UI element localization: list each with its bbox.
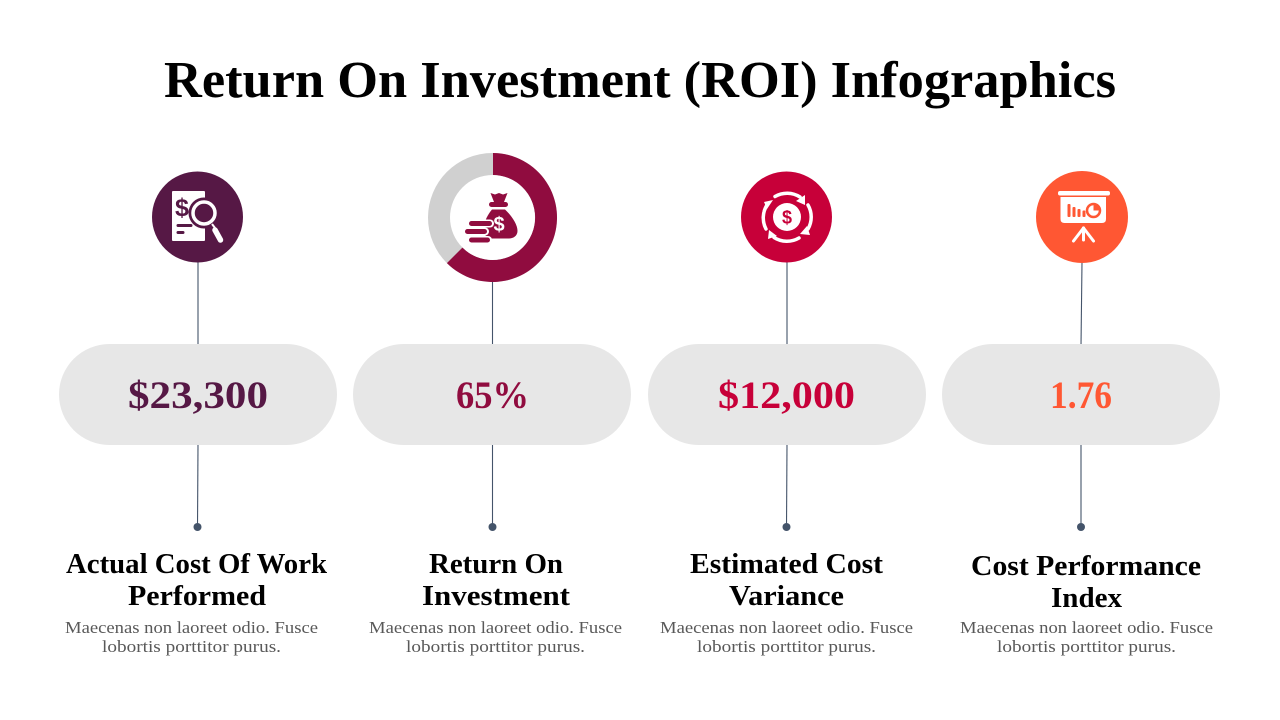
description bbox=[660, 618, 913, 656]
value pill bbox=[648, 344, 926, 445]
donut chart: 65% bbox=[428, 153, 557, 282]
description: lobortis porttitor purus. bbox=[697, 637, 876, 656]
panel: cost performance index bbox=[942, 171, 1220, 656]
heading: Index bbox=[1051, 583, 1122, 614]
connector: pill to dot bbox=[782, 445, 790, 531]
panel: return on investment bbox=[353, 153, 631, 656]
heading bbox=[66, 549, 327, 612]
icon: report with magnifier: $ bbox=[175, 194, 189, 222]
description bbox=[960, 618, 1213, 656]
icon: circular dollar arrows: $ bbox=[782, 208, 792, 228]
icon: money bag and coins: $ bbox=[493, 214, 505, 236]
description: lobortis porttitor purus. bbox=[997, 637, 1176, 656]
connector: donut to pill bbox=[492, 281, 494, 345]
connector: icon to pill bbox=[786, 262, 788, 346]
icon: circular dollar arrows bbox=[741, 172, 832, 262]
connector: pill to dot bbox=[488, 445, 496, 531]
description: lobortis porttitor purus. bbox=[406, 637, 585, 656]
heading: Actual Cost Of Work bbox=[66, 549, 327, 580]
panel: estimated cost variance bbox=[648, 172, 926, 656]
heading: Cost Performance bbox=[971, 551, 1201, 582]
description: Maecenas non laoreet odio. Fusce bbox=[960, 618, 1213, 637]
connector: pill to dot bbox=[1077, 445, 1085, 531]
value pill bbox=[942, 344, 1220, 445]
heading: Return On bbox=[429, 549, 563, 580]
icon: report with magnifier bbox=[152, 172, 243, 262]
description: Maecenas non laoreet odio. Fusce bbox=[369, 618, 622, 637]
heading: Investment bbox=[422, 581, 571, 612]
connector: icon to pill bbox=[197, 262, 199, 345]
value pill: $23,300 bbox=[128, 374, 268, 417]
description: Maecenas non laoreet odio. Fusce bbox=[660, 618, 913, 637]
description: Maecenas non laoreet odio. Fusce bbox=[65, 618, 318, 637]
value pill: 65% bbox=[456, 374, 529, 417]
connector: icon to pill bbox=[1081, 262, 1082, 346]
description: lobortis porttitor purus. bbox=[102, 637, 281, 656]
value pill: $12,000 bbox=[718, 374, 855, 417]
value pill bbox=[353, 344, 631, 445]
heading bbox=[971, 551, 1201, 614]
description bbox=[65, 618, 318, 656]
heading: Variance bbox=[729, 581, 844, 612]
description bbox=[369, 618, 622, 656]
value pill: 1.76 bbox=[1050, 374, 1112, 417]
heading: Estimated Cost bbox=[690, 549, 884, 580]
title: Return On Investment (ROI) Infographics bbox=[164, 52, 1116, 109]
icon: presentation board bbox=[1036, 171, 1128, 263]
heading: Performed bbox=[128, 581, 266, 612]
heading bbox=[422, 549, 571, 612]
heading bbox=[690, 549, 884, 612]
value pill bbox=[59, 344, 337, 445]
connector: pill to dot bbox=[194, 445, 202, 531]
panel: actual cost of work performed bbox=[59, 172, 337, 656]
icon: money bag and coins bbox=[463, 193, 518, 244]
